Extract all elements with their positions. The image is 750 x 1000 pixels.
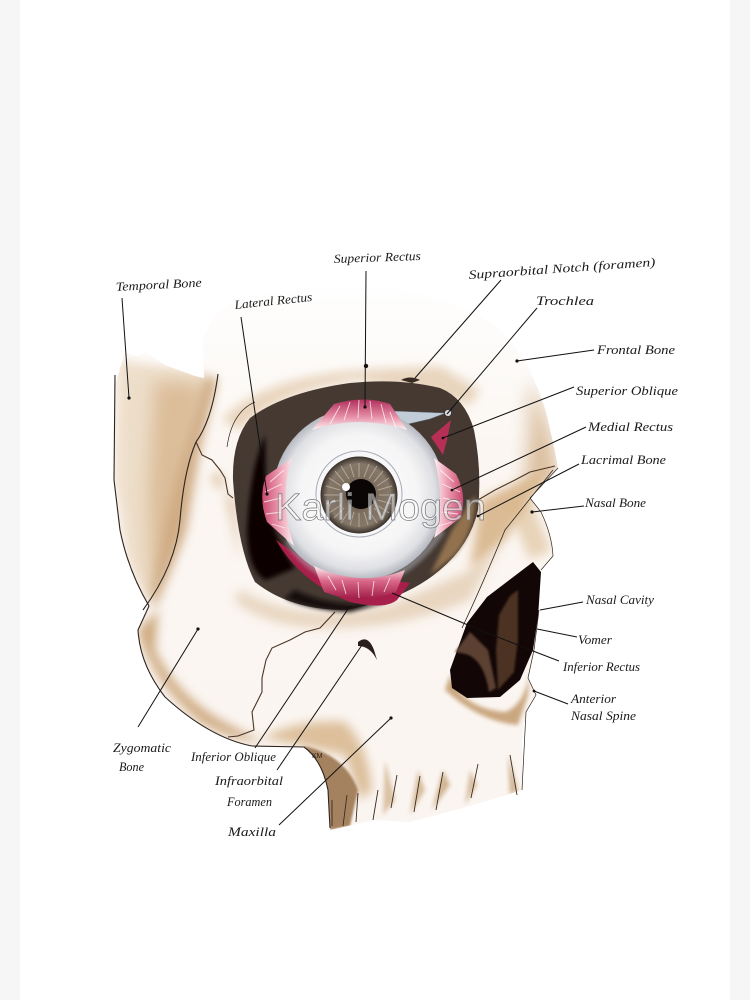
label: Superior Oblique: Superior Oblique <box>576 384 679 398</box>
signature: KM <box>312 753 323 760</box>
maxilla tooth root lines <box>332 755 517 826</box>
iris <box>321 457 397 533</box>
label: Zygomatic Bone <box>113 627 200 774</box>
iris fibres <box>324 463 394 527</box>
label: Inferior Rectus <box>392 593 640 674</box>
label: Zygomatic Bone: Bone <box>119 760 144 774</box>
infraorbital foramen <box>358 639 377 660</box>
sutures <box>196 442 555 737</box>
label: Anterior Nasal Spine: Nasal Spine <box>570 709 636 723</box>
skull illustration <box>113 353 558 830</box>
label: Infraorbital Foramen <box>214 645 362 809</box>
label: Anterior Nasal Spine: Anterior <box>570 692 616 706</box>
label: Vomer: Vomer <box>578 633 612 647</box>
label: Nasal Cavity <box>540 593 654 610</box>
superior oblique tendon and trochlea <box>394 410 452 455</box>
label: Infraorbital Foramen: Infraorbital <box>214 774 284 788</box>
eyeball <box>262 400 463 606</box>
label: Inferior Oblique <box>190 606 350 764</box>
superior rectus <box>312 400 407 430</box>
label: Infraorbital Foramen: Foramen <box>226 795 272 809</box>
inferior concha <box>455 632 496 692</box>
label: Maxilla: Maxilla <box>227 825 276 839</box>
pupil <box>346 479 376 509</box>
label: Frontal Bone: Frontal Bone <box>596 343 676 357</box>
label: Inferior Oblique: Inferior Oblique <box>190 750 276 764</box>
medial rectus <box>434 458 463 538</box>
label: Frontal Bone <box>515 343 676 363</box>
limbus ring <box>316 451 402 537</box>
label: Trochlea <box>447 294 594 414</box>
label: Superior Rectus <box>334 249 421 409</box>
inferior rectus and inferior oblique muscles <box>276 540 410 606</box>
label: Superior Oblique <box>442 384 679 439</box>
label: Nasal Bone <box>530 496 646 514</box>
label: Lacrimal Bone <box>477 453 667 517</box>
bone base shape <box>114 287 558 830</box>
right page margin strip <box>730 0 750 1000</box>
label: Temporal Bone: Temporal Bone <box>115 275 203 294</box>
label: Maxilla <box>227 716 393 839</box>
label: Nasal Cavity: Nasal Cavity <box>585 593 654 607</box>
label: Zygomatic Bone: Zygomatic <box>113 741 171 755</box>
lateral rectus <box>262 458 294 546</box>
label: Nasal Bone: Nasal Bone <box>584 496 646 510</box>
label: Lacrimal Bone: Lacrimal Bone <box>580 453 667 467</box>
sclera <box>273 408 445 580</box>
label: Supraorbital Notch (foramen): Supraorbital Notch (foramen) <box>468 255 656 282</box>
iris highlight <box>342 483 350 491</box>
muscle tendon fibres <box>264 400 461 598</box>
orbit <box>233 381 479 612</box>
bone watercolour shading <box>116 360 556 830</box>
label: Anterior Nasal Spine <box>533 690 636 723</box>
watermark: Karli Mogen <box>275 487 486 529</box>
label: Medial Rectus <box>451 420 673 491</box>
inferior rectus belly <box>314 566 405 599</box>
label: Lateral Rectus <box>233 290 313 496</box>
deep orbit shadow <box>247 435 295 580</box>
nasal cavity <box>450 562 541 698</box>
label: Inferior Rectus: Inferior Rectus <box>562 660 640 674</box>
label: Trochlea: Trochlea <box>536 294 594 308</box>
label: Vomer <box>537 629 612 647</box>
nasal septum <box>496 590 518 690</box>
label: Medial Rectus: Medial Rectus <box>587 420 673 434</box>
superior oblique muscle <box>431 420 451 455</box>
label: Superior Rectus: Superior Rectus <box>334 249 421 266</box>
bone contour lines <box>114 374 558 828</box>
label: Temporal Bone <box>115 275 203 400</box>
label: Lateral Rectus: Lateral Rectus <box>233 290 313 312</box>
label: Supraorbital Notch (foramen) <box>401 255 656 383</box>
left page margin strip <box>0 0 20 1000</box>
